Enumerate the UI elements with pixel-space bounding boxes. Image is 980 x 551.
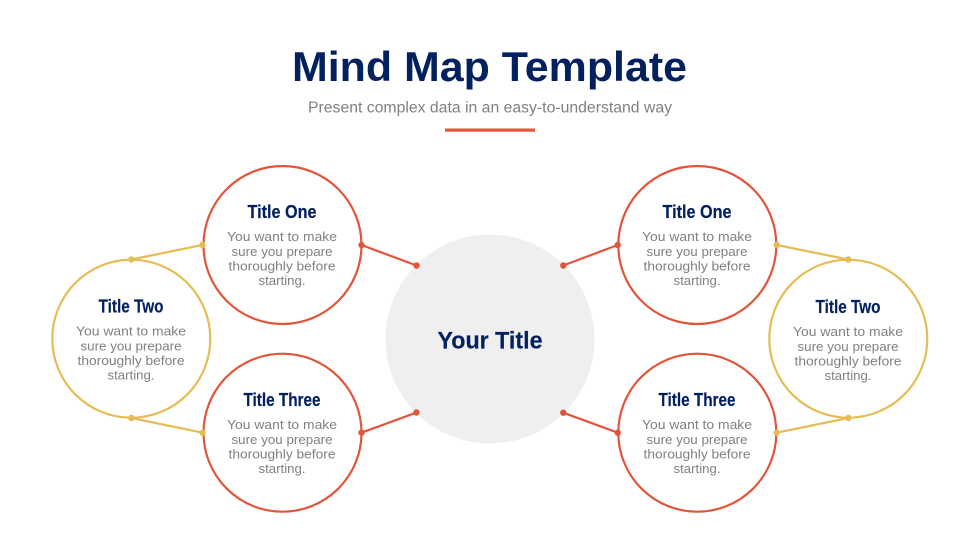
node: right title one: sure you prepare — [646, 244, 748, 259]
central circle: your title — [386, 234, 594, 444]
node: right title two: Title Two — [816, 297, 880, 317]
node: left title two: starting. — [108, 367, 154, 382]
node: left title one — [204, 166, 362, 324]
node: right title two: thoroughly before — [794, 353, 902, 368]
node: right title two: starting. — [824, 368, 872, 383]
central circle: your title: Your Title — [438, 328, 542, 354]
subtitle: Present complex data in an easy-to-understand way — [308, 100, 672, 116]
connector: right title three to right title two — [774, 415, 852, 436]
connector: left title one to left title two — [128, 242, 206, 263]
node: right title three: sure you prepare — [646, 432, 748, 447]
connector: center to right title one — [560, 242, 621, 269]
node: left title one: thoroughly before — [228, 258, 336, 274]
connector: center to left title one — [358, 242, 420, 269]
node: right title three — [618, 354, 776, 512]
connector: left title three to left title two — [128, 415, 206, 436]
node: left title three: starting. — [258, 461, 306, 476]
node: right title one: You want to make — [642, 229, 752, 244]
node: left title two: Title Two — [98, 296, 164, 316]
node: left title three: You want to make — [227, 417, 337, 432]
node: left title one: starting. — [258, 273, 306, 288]
node: left title three: sure you prepare — [232, 432, 332, 447]
title: Mind Map Template — [292, 43, 687, 90]
connector: right title one to right title two — [774, 242, 852, 263]
node: right title three: Title Three — [658, 390, 736, 410]
node: right title two: You want to make — [793, 324, 903, 339]
node: left title three — [204, 354, 362, 512]
node: right title one: starting. — [674, 273, 720, 288]
node: right title three: starting. — [674, 461, 720, 476]
node: left title two: thoroughly before — [78, 353, 184, 368]
connector: center to right title three — [560, 410, 621, 436]
accent underline — [445, 128, 535, 132]
node: left title one: Title One — [248, 202, 316, 222]
node: left title two: You want to make — [76, 323, 186, 338]
header — [292, 43, 687, 132]
node: right title two: sure you prepare — [798, 339, 898, 354]
node: left title three: Title Three — [244, 390, 320, 410]
node: left title one: sure you prepare — [232, 244, 332, 259]
node: left title one: You want to make — [227, 229, 337, 244]
node: right title one: thoroughly before — [644, 258, 750, 274]
connector: center to left title three — [358, 409, 420, 436]
node: right title three: You want to make — [642, 417, 752, 432]
node: left title two: sure you prepare — [80, 338, 182, 353]
node: right title one: Title One — [662, 202, 732, 222]
node: right title three: thoroughly before — [644, 446, 750, 461]
node: right title one — [618, 166, 776, 324]
node: left title two — [52, 260, 210, 418]
node: right title two — [769, 260, 927, 418]
node: left title three: thoroughly before — [228, 446, 336, 461]
